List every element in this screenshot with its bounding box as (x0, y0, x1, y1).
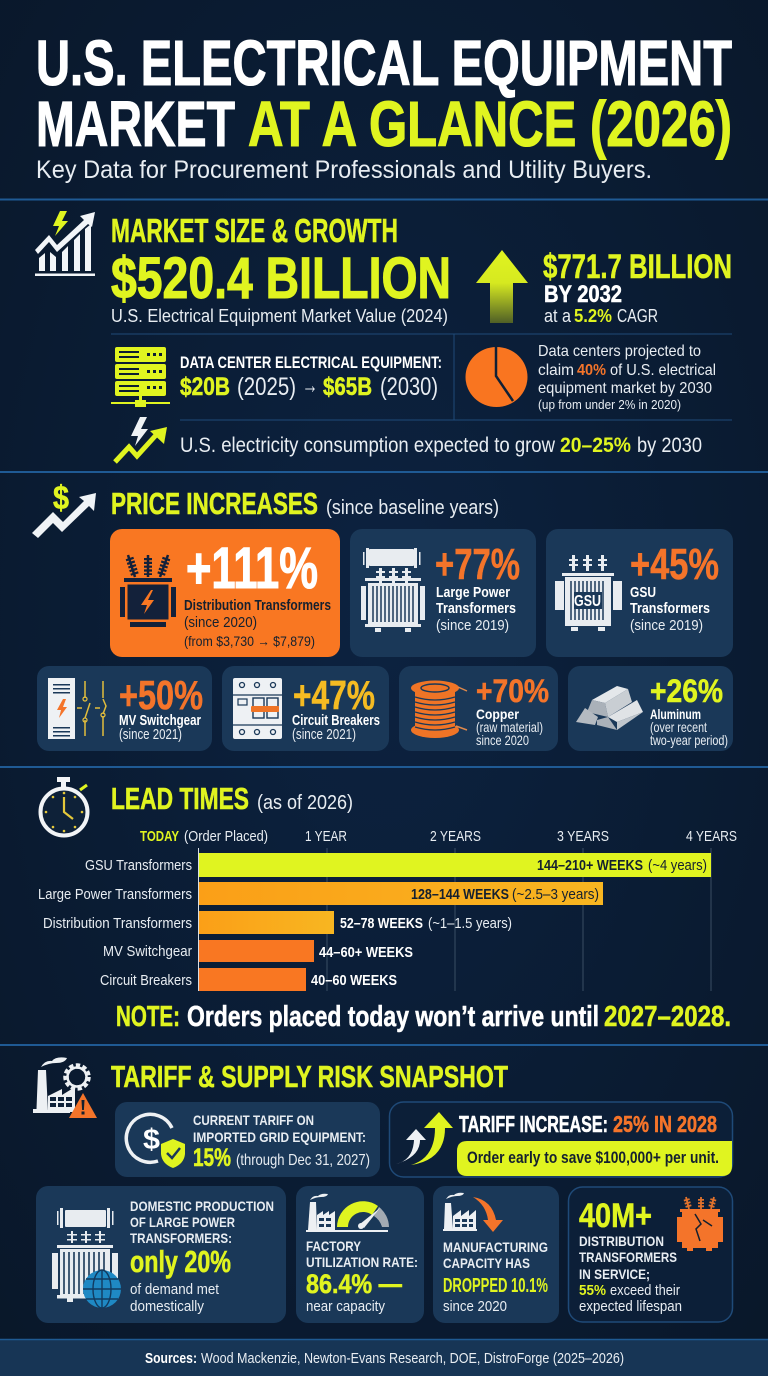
bar: large power transformers: Large Power Transformers (38, 886, 192, 903)
card: distribution transformers: (from $3,730 → $7,879) (184, 633, 315, 649)
card: manufacturing capacity: MANUFACTURING (443, 1239, 548, 1255)
callout: order early (457, 1141, 732, 1176)
chart axis labels: 4 YEARS (686, 828, 737, 845)
card: MV switchgear (37, 666, 212, 751)
card: large power transformers: +77% (435, 540, 520, 589)
heading: lead times: LEAD TIMES (111, 781, 249, 816)
icon: GSU transformer (555, 555, 622, 631)
card: domestic production: domestically (130, 1298, 204, 1315)
bar: circuit breakers (100, 968, 397, 991)
icon: growth chart with bolt (35, 211, 95, 276)
card: large power transformers: Transformers (436, 600, 516, 617)
panel: lead times (38, 777, 737, 1033)
data centers text: 40% (577, 362, 606, 379)
card: large power transformers: Large Power (436, 584, 510, 601)
electricity consumption: U.S. electricity consumption expected to grow (180, 434, 556, 457)
icon: distribution transformer (120, 555, 176, 627)
card: GSU transformers: GSU (574, 593, 601, 610)
heading: market size: MARKET SIZE & GROWTH (111, 212, 398, 249)
card: domestic production: only 20% (130, 1244, 231, 1279)
note: Orders placed today won’t arrive until (187, 1001, 599, 1033)
chart axis labels: TODAY (140, 828, 179, 845)
icon: copper coil (411, 680, 467, 738)
card: factory utilization (296, 1186, 424, 1323)
bar: circuit breakers: 40–60 WEEKS (311, 972, 397, 989)
card: domestic production: OF LARGE POWER (130, 1214, 235, 1230)
data center equipment: $20B (180, 373, 230, 401)
data center equipment: DATA CENTER ELECTRICAL EQUIPMENT: (180, 353, 442, 372)
bar: MV switchgear (103, 940, 413, 962)
data center equipment: (2030) (380, 373, 438, 401)
card: current tariff: CURRENT TARIFF ON (193, 1112, 314, 1128)
card: current tariff: IMPORTED GRID EQUIPMENT: (193, 1129, 366, 1145)
data centers text: of U.S. electrical (610, 362, 716, 379)
card: large power transformers (350, 529, 536, 657)
title: MARKET (36, 88, 235, 160)
card: copper: +70% (476, 673, 549, 709)
icon: large power transformer (361, 548, 425, 632)
card: tariff increase: TARIFF INCREASE: (459, 1111, 608, 1137)
card: copper: Copper (476, 706, 519, 722)
card: distribution transformers in service: DISTRIBUTION (579, 1233, 664, 1249)
card: MV switchgear: MV Switchgear (119, 712, 201, 729)
icon: dollar shield (126, 1114, 185, 1168)
card: current tariff: (through Dec 31, 2027) (236, 1152, 370, 1169)
forecast 2032: at a (544, 306, 572, 326)
chart axis labels: 2 YEARS (430, 828, 481, 845)
icon: circuit breaker (233, 678, 282, 739)
forecast 2032: BY 2032 (544, 281, 622, 308)
panel: tariff and supply risk (33, 1057, 732, 1323)
card: manufacturing capacity: since 2020 (443, 1298, 507, 1315)
bar: GSU transformers: GSU Transformers (85, 857, 192, 874)
footer: sources (0, 1340, 768, 1376)
forecast 2032: CAGR (617, 306, 658, 326)
card: domestic production: TRANSFORMERS: (130, 1230, 232, 1246)
data centers text: (up from under 2% in 2020) (538, 397, 681, 412)
forecast 2032 (543, 248, 732, 326)
electricity consumption: by 2030 (637, 434, 702, 457)
subtitle: Key Data for Procurement Professionals and Utility Buyers. (36, 156, 652, 184)
card: aluminum: Aluminum (650, 706, 701, 722)
data center equipment: → (302, 372, 318, 399)
icon: dollar rising arrow: $ (53, 479, 69, 516)
card: aluminum: +26% (650, 673, 723, 709)
bar: large power transformers: 128–144 WEEKS (411, 886, 509, 903)
card: distribution transformers: +111% (186, 536, 318, 601)
footer: sources: Sources: (145, 1350, 197, 1367)
chart axis labels: 3 YEARS (557, 828, 609, 845)
bar: GSU transformers: (~4 years) (648, 857, 707, 874)
panel: market size and growth (35, 211, 732, 462)
bar chart: lead times (38, 853, 711, 991)
icon: bolt and rising arrow (115, 417, 167, 462)
card: distribution transformers: (since 2020) (184, 614, 257, 631)
data centers text: claim (538, 362, 574, 379)
icon: dollar rising arrow (32, 479, 96, 538)
bar: circuit breakers: Circuit Breakers (100, 972, 192, 989)
electricity consumption: 20–25% (560, 434, 631, 457)
icon: cracked transformer (677, 1197, 723, 1251)
card: distribution transformers (110, 529, 340, 657)
icon: dollar shield: $ (143, 1124, 160, 1156)
data centers text (538, 343, 716, 412)
card: distribution transformers in service (568, 1187, 732, 1322)
card: circuit breakers: Circuit Breakers (292, 712, 380, 729)
card: distribution transformers in service: IN SERVICE; (579, 1266, 650, 1282)
card: manufacturing capacity (433, 1186, 559, 1323)
footer: sources: Wood Mackenzie, Newton-Evans Research, DOE, DistroForge (2025–2026) (201, 1350, 624, 1367)
note: NOTE: (116, 1001, 180, 1033)
bar: distribution transformers: 52–78 WEEKS (340, 915, 423, 932)
card: domestic production: DOMESTIC PRODUCTION (130, 1198, 274, 1214)
data center equipment (180, 353, 442, 401)
data center equipment: $65B (323, 373, 372, 401)
card: aluminum: (over recent (650, 719, 707, 735)
icon: pie chart (466, 347, 528, 407)
card: distribution transformers: Distribution Transformers (184, 597, 331, 614)
card: domestic production: of demand met (130, 1281, 220, 1298)
card: distribution transformers in service: expected lifespan (579, 1298, 682, 1315)
bar: MV switchgear: MV Switchgear (103, 943, 192, 960)
card: manufacturing capacity: CAPACITY HAS (443, 1255, 530, 1271)
card: GSU transformers: +45% (630, 540, 719, 589)
bar: large power transformers (38, 882, 603, 905)
card: circuit breakers (222, 666, 389, 751)
icon: aluminum ingots (576, 686, 643, 730)
data centers text: Data centers projected to (538, 343, 701, 360)
card: tariff increase (390, 1102, 732, 1177)
bar: GSU transformers (85, 853, 711, 877)
card: GSU transformers: GSU (630, 584, 656, 601)
bar: large power transformers: (~2.5–3 years) (512, 886, 599, 903)
card: MV switchgear: +50% (119, 672, 203, 718)
card: factory utilization: near capacity (306, 1298, 385, 1315)
bar: GSU transformers: 144–210+ WEEKS (537, 857, 643, 874)
card: factory utilization: 86.4% — (306, 1269, 402, 1299)
chart axis labels: (Order Placed) (184, 828, 268, 845)
icon: factory with warning (33, 1057, 97, 1118)
icon: switchgear (48, 678, 106, 739)
bar: distribution transformers: (~1–1.5 years) (428, 915, 512, 932)
note: 2027–2028. (604, 1001, 731, 1033)
data center equipment: (2025) (237, 373, 296, 401)
chart axis labels: 1 YEAR (305, 828, 347, 845)
bar: distribution transformers (43, 911, 512, 934)
bar: MV switchgear: 44–60+ WEEKS (319, 944, 413, 961)
card: distribution transformers in service: exceed their (610, 1282, 680, 1299)
chart axis labels (140, 828, 737, 845)
caption: market value: U.S. Electrical Equipment Market Value (2024) (111, 306, 448, 326)
card: GSU transformers: Transformers (630, 600, 710, 617)
forecast 2032: 5.2% (574, 306, 612, 326)
card: large power transformers: (since 2019) (436, 617, 509, 634)
card: circuit breakers: +47% (293, 672, 375, 718)
title (36, 27, 732, 160)
heading: price increases: (since baseline years) (326, 497, 499, 519)
card: current tariff: 15% (193, 1144, 231, 1172)
icon: server rack (111, 347, 170, 407)
card: copper: (raw material) (476, 719, 543, 735)
icon: double up arrows (396, 1112, 453, 1165)
data centers text: equipment market by 2030 (538, 380, 712, 397)
icon: up arrow (476, 250, 528, 323)
icon: stopwatch (40, 777, 88, 836)
card: manufacturing capacity: DROPPED 10.1% (443, 1275, 548, 1297)
big number: 520.4 billion: $520.4 BILLION (111, 246, 451, 311)
card: copper (399, 666, 558, 751)
card: domestic production (36, 1186, 286, 1323)
card: MV switchgear: (since 2021) (119, 726, 182, 743)
icon: factory and gauge (306, 1194, 389, 1232)
card: factory utilization: FACTORY (306, 1238, 362, 1254)
icon: factory with down arrow (443, 1193, 503, 1232)
panel: price increases (32, 479, 733, 751)
heading: tariff snapshot: TARIFF & SUPPLY RISK SNAPSHOT (111, 1059, 508, 1094)
heading: lead times: (as of 2026) (257, 792, 353, 814)
bar: distribution transformers: Distribution Transformers (43, 915, 192, 932)
card: aluminum (568, 666, 733, 751)
card: distribution transformers in service: TRANSFORMERS (579, 1249, 677, 1265)
icon: transformer with globe (52, 1208, 121, 1308)
card: copper: since 2020 (476, 732, 529, 748)
card: current tariff (115, 1102, 380, 1177)
card: tariff increase: 25% IN 2028 (613, 1111, 717, 1137)
heading: price increases: PRICE INCREASES (111, 486, 318, 521)
card: GSU transformers: (since 2019) (630, 617, 703, 634)
card: aluminum: two-year period) (650, 732, 728, 748)
card: distribution transformers in service: 40M+ (579, 1197, 652, 1235)
card: distribution transformers in service: 55% (579, 1282, 606, 1299)
card: circuit breakers: (since 2021) (292, 726, 356, 743)
card: GSU transformers (546, 529, 733, 657)
card: factory utilization: UTILIZATION RATE: (306, 1254, 418, 1270)
